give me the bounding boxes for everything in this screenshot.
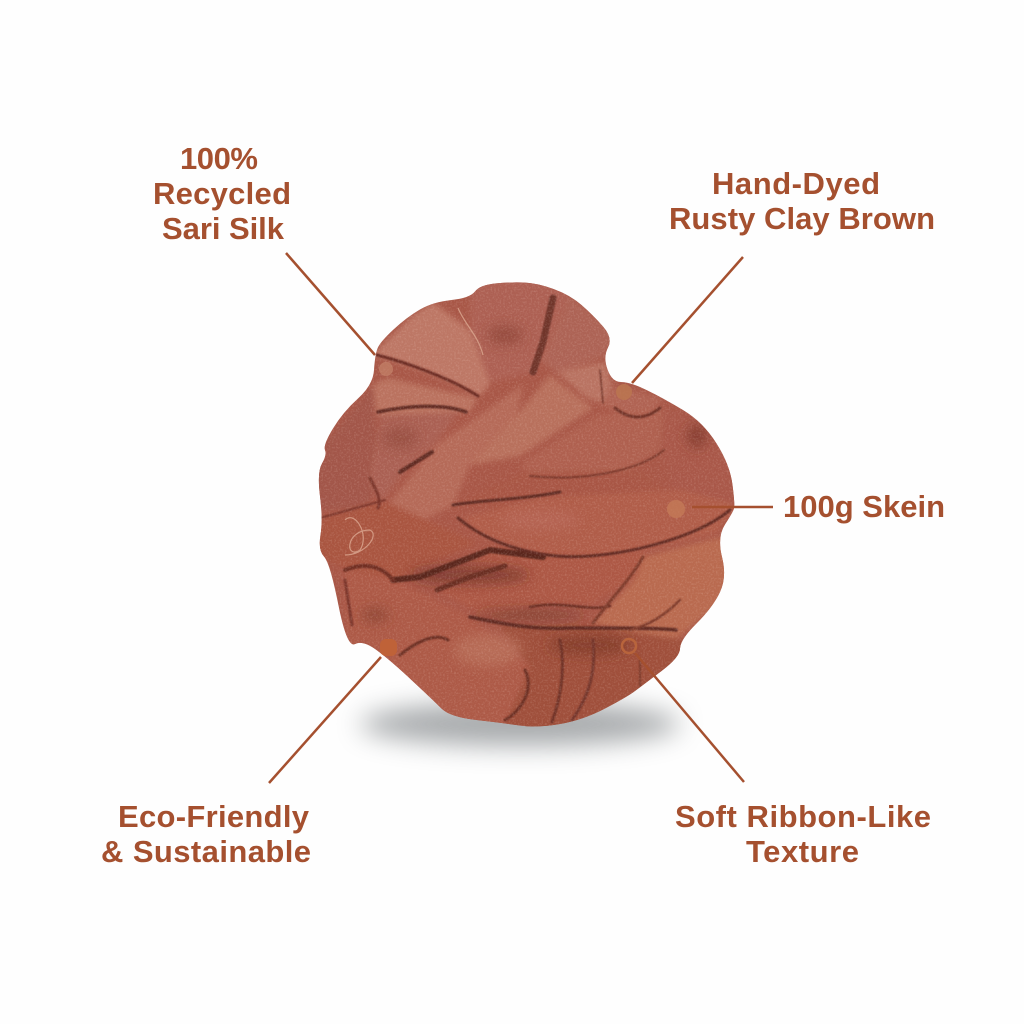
skein of sari silk [310, 275, 740, 735]
right lump below knot [476, 495, 734, 548]
loose threads [345, 308, 483, 555]
knot bands [373, 378, 477, 415]
callout: recycled sari silk: Sari Silk [162, 211, 285, 246]
callout: recycled sari silk: 100% [180, 141, 258, 176]
callout: weight: 100g Skein [783, 489, 945, 524]
callout: eco-friendly: Eco-Friendly [118, 799, 310, 834]
lower right ruched band [498, 625, 685, 732]
callout: hand-dyed colour [616, 166, 935, 400]
middle band [437, 550, 647, 617]
callout: recycled sari silk: Recycled [153, 176, 291, 211]
lower left band [344, 629, 504, 724]
callout: eco-friendly [101, 639, 397, 869]
fabric grain [310, 275, 740, 735]
callout: hand-dyed colour: Hand-Dyed [712, 166, 880, 201]
creases and gaps [320, 298, 730, 722]
left bulge [318, 390, 366, 512]
callout: ribbon texture: Texture [746, 834, 859, 869]
shadow under skein [360, 702, 680, 746]
callout: hand-dyed colour: Rusty Clay Brown [669, 201, 935, 236]
top cloth panels [470, 278, 570, 382]
callout: weight [667, 489, 945, 524]
callout: ribbon texture: Soft Ribbon-Like [675, 799, 931, 834]
left middle band [320, 502, 426, 564]
orange right band [593, 537, 732, 638]
callout: recycled sari silk [153, 141, 393, 376]
callout: eco-friendly: & Sustainable [101, 834, 311, 869]
soft tone patches [454, 634, 522, 666]
callout: ribbon texture [622, 639, 931, 869]
